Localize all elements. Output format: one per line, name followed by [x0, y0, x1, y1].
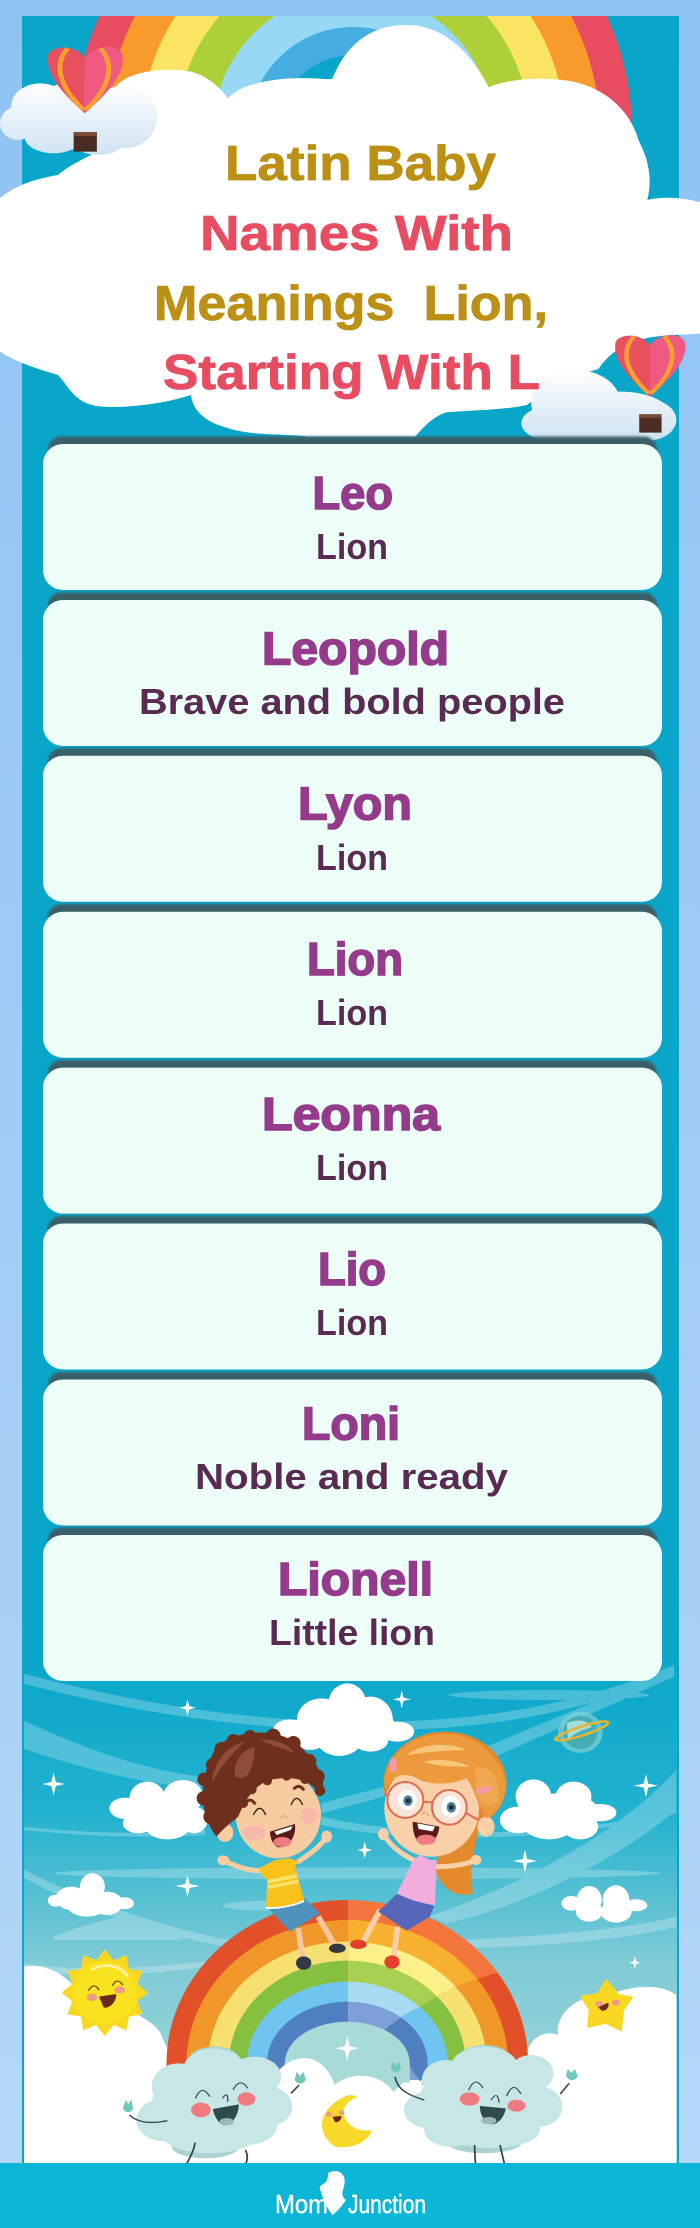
- card: Lion: [43, 904, 662, 1058]
- MomJunction logo: Mom: [275, 2189, 328, 2219]
- card: Lio: [43, 1216, 662, 1370]
- card: Leopold: Leopold: [262, 622, 449, 674]
- sky streaks: [22, 1665, 676, 1975]
- girl top: [397, 1855, 437, 1905]
- left balloon: [48, 47, 123, 152]
- card: Lionell: Little lion: [269, 1612, 435, 1653]
- lower illustration: [24, 1665, 677, 2163]
- sparkle under rainbow: [336, 2036, 358, 2061]
- rainbow arcs: [84, 16, 632, 124]
- card: Lyon: [43, 748, 662, 902]
- right balloon: [615, 335, 685, 433]
- title: Latin Baby: [225, 137, 496, 191]
- girl: [350, 1732, 507, 1969]
- sparkle right: [629, 1956, 640, 1969]
- card: Leo: Leo: [312, 467, 393, 519]
- boy: [197, 1729, 346, 1970]
- right smiling cloud: [391, 2045, 578, 2164]
- card: Loni: Loni: [302, 1398, 400, 1450]
- sparkles: [42, 1690, 658, 1897]
- frame edges: [22, 1663, 24, 2163]
- card: Leo: Lion: [316, 526, 388, 567]
- card: Leopold: [43, 592, 662, 746]
- card: Lion: Lion: [316, 992, 388, 1033]
- sky background: [22, 1663, 679, 2163]
- cloud lower right: [562, 1885, 647, 1923]
- card: Leo: [43, 436, 662, 590]
- rainbow: [166, 1900, 528, 2092]
- boy limbs: [225, 1838, 326, 1871]
- girl hair back: [383, 1732, 507, 1895]
- logo icon: [320, 2171, 346, 2215]
- kids: [197, 1729, 507, 1970]
- card: Leonna: Leonna: [262, 1088, 440, 1140]
- card: Lio: Lion: [316, 1302, 388, 1343]
- boy head: [217, 1823, 233, 1842]
- planet: [553, 1712, 610, 1753]
- white cloud bumps under the rainbow: [280, 2058, 422, 2105]
- title: [154, 137, 548, 400]
- card: Loni: Noble and ready: [195, 1456, 508, 1497]
- girl shorts: [378, 1894, 434, 1931]
- cloud top centre: [273, 1683, 414, 1756]
- white clouds: [42, 1683, 658, 1923]
- boy shorts: [268, 1898, 320, 1932]
- card: Loni: [43, 1372, 662, 1526]
- title: Meanings Lion,: [154, 277, 548, 331]
- left small cloud: [0, 80, 157, 155]
- girl limbs: [384, 1835, 475, 1867]
- sun: [62, 1949, 148, 2036]
- card: Lyon: Lyon: [298, 778, 412, 830]
- card: Lionell: Lionell: [278, 1553, 433, 1605]
- card: Lio: Lio: [318, 1243, 386, 1295]
- cloud left: [109, 1780, 208, 1839]
- card: Lionell: [43, 1528, 662, 1681]
- card: Lion: Lion: [307, 933, 403, 985]
- boy shirt: [259, 1858, 304, 1907]
- white ground clouds: [23, 1966, 676, 2164]
- star: [582, 1981, 632, 2030]
- card: Leonna: [43, 1060, 662, 1214]
- girl head: [477, 1817, 495, 1837]
- title: Names With: [200, 207, 513, 261]
- MomJunction logo: Junction: [348, 2189, 426, 2219]
- footer bar: [0, 2163, 700, 2228]
- MomJunction logo: [275, 2171, 426, 2219]
- name cards: [43, 436, 662, 1681]
- moon: [322, 2095, 371, 2147]
- bottom clouds and rainbow: [23, 1900, 676, 2227]
- card: Leonna: Lion: [316, 1147, 388, 1188]
- right small cloud: [521, 370, 676, 443]
- cloud right: [500, 1779, 616, 1839]
- scene: [24, 1665, 676, 2163]
- card: Leopold: Brave and bold people: [139, 681, 565, 722]
- header illustration: [0, 0, 700, 443]
- left smiling cloud: [123, 2047, 306, 2164]
- title: Starting With L: [163, 346, 540, 400]
- cloud lower left: [48, 1873, 134, 1917]
- main white cloud: [0, 25, 700, 437]
- card: Lyon: Lion: [316, 837, 388, 878]
